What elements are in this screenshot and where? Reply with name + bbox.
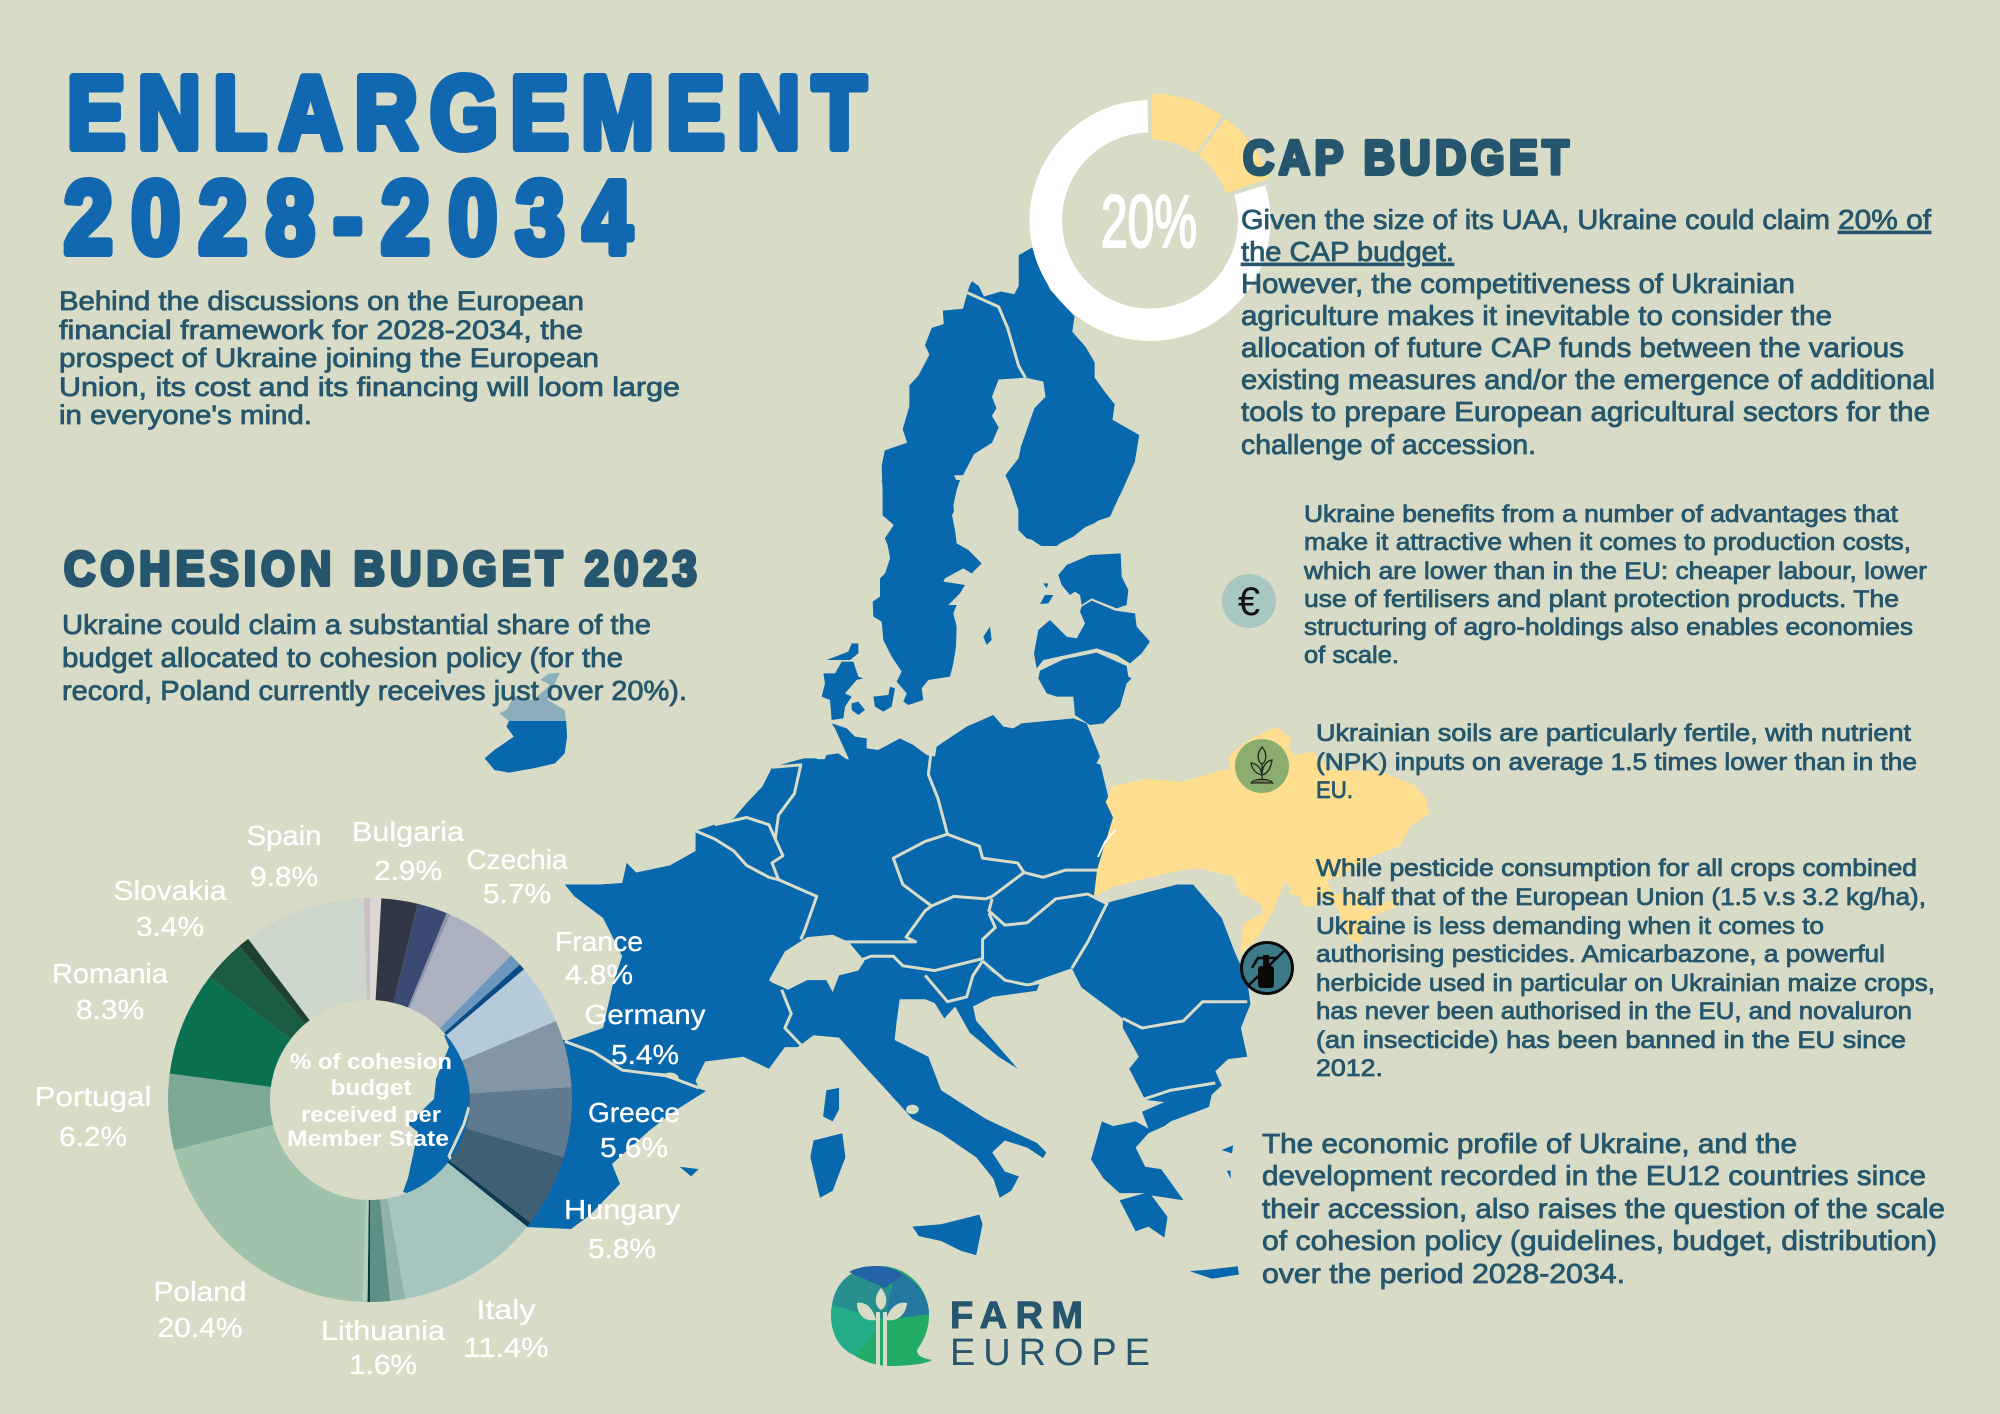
donut country labels: 5.7%	[483, 878, 551, 909]
text: fertile soils: (NPK) inputs on average 1.5 times lower than in the	[1316, 749, 1917, 776]
Iberian peninsula	[403, 1035, 706, 1229]
text: pesticides: has never been authorised in the EU, and novaluron	[1316, 998, 1912, 1025]
donut country labels: Slovakia	[114, 875, 227, 906]
logo mark	[831, 1266, 932, 1366]
text: economic profile	[1262, 1128, 1945, 1289]
text: production costs: structuring of agro-holdings also enables economies	[1304, 614, 1913, 641]
Ireland	[485, 673, 567, 773]
text: economic profile: development recorded in the EU12 countries since	[1262, 1160, 1926, 1191]
text: production costs: Ukraine benefits from a number of advantages that	[1304, 501, 1898, 528]
Crete	[1190, 1266, 1239, 1279]
title: ENLARGEMENT	[67, 55, 866, 171]
donut centre label: received per	[301, 1102, 441, 1127]
donut country labels: Bulgaria	[352, 816, 464, 847]
text: pesticides: (an insecticide) has been banned in the EU since	[1316, 1027, 1906, 1054]
Farm Europe logo	[831, 1266, 1150, 1374]
CAP budget text: agriculture makes it inevitable to consider the	[1241, 300, 1832, 331]
title: 2028-2034	[64, 160, 632, 276]
donut country labels: Romania	[52, 958, 168, 989]
donut country labels: Poland	[154, 1276, 246, 1307]
CAP budget text: tools to prepare European agricultural sectors for the	[1241, 396, 1930, 427]
donut country labels: 2.9%	[374, 855, 442, 886]
icon: euro	[1222, 574, 1276, 628]
Baltic region: Sweden south, Finland south, Baltic states, Denmark, Germany and Poland north	[780, 480, 1150, 880]
donut country labels: France	[555, 926, 643, 957]
icon: plant	[1235, 739, 1289, 793]
donut country labels: 11.4%	[464, 1332, 548, 1363]
text: production costs: use of fertilisers and plant protection products. The	[1304, 586, 1899, 613]
intro text: in everyone's mind.	[59, 400, 312, 430]
text: production costs: which are lower than in the EU: cheaper labour, lower	[1303, 558, 1927, 585]
donut country labels: 5.4%	[611, 1039, 679, 1070]
donut country labels: Lithuania	[321, 1315, 445, 1346]
Switzerland gap	[769, 935, 865, 992]
CAP budget text: challenge of accession.	[1241, 429, 1536, 460]
text: economic profile: of cohesion policy (guidelines, budget, distribution)	[1262, 1225, 1937, 1256]
text: fertile soils	[1316, 720, 1917, 804]
text: production costs	[1303, 501, 1927, 669]
cohesion donut chart	[219, 949, 521, 1251]
20% label: 20%	[1101, 180, 1197, 263]
intro text: financial framework for 2028-2034, the	[59, 315, 583, 345]
donut country labels: 5.8%	[588, 1233, 656, 1264]
text: production costs: make it attractive when it comes to production costs,	[1304, 529, 1911, 556]
donut country labels: Hungary	[564, 1194, 680, 1225]
text: economic profile: their accession, also raises the question of the scale	[1262, 1193, 1945, 1224]
Ukraine	[1094, 727, 1429, 955]
icon: euro: €	[1238, 580, 1260, 624]
logo wordmark: FARM	[950, 1295, 1083, 1337]
intro text	[59, 286, 680, 430]
CAP budget heading: CAP BUDGET	[1243, 131, 1569, 185]
donut country labels: 9.8%	[250, 861, 318, 892]
text: pesticides: is half that of the European Union (1.5 v.s 3.2 kg/ha),	[1316, 884, 1926, 911]
donut country labels	[34, 816, 706, 1380]
CAP 20% ring chart	[1046, 116, 1254, 325]
CAP budget text: the CAP budget.	[1241, 236, 1454, 267]
text: pesticides: 2012.	[1316, 1055, 1383, 1082]
donut centre label: Member State	[287, 1126, 449, 1151]
donut country labels: Spain	[246, 820, 322, 851]
donut centre label: % of cohesion	[290, 1049, 452, 1074]
title	[64, 55, 866, 276]
donut country labels: Portugal	[34, 1081, 152, 1112]
donut centre label: budget	[330, 1075, 412, 1100]
Greece	[1091, 1093, 1212, 1238]
text: pesticides: While pesticide consumption for all crops combined	[1316, 855, 1917, 882]
Corsica	[823, 1088, 839, 1121]
donut country labels: 1.6%	[349, 1349, 417, 1380]
text: pesticides: authorising pesticides. Amicarbazone, a powerful	[1316, 941, 1885, 968]
cohesion budget text: budget allocated to cohesion policy (for the	[62, 642, 623, 673]
CAP budget text	[1241, 204, 1935, 460]
text: production costs: of scale.	[1304, 642, 1399, 669]
cohesion budget heading: COHESION BUDGET 2023	[64, 542, 697, 596]
Sweden and Finland north	[880, 248, 1139, 596]
donut country labels: 20.4%	[158, 1312, 242, 1343]
Sardinia	[810, 1133, 845, 1198]
donut country labels: 4.8%	[565, 959, 633, 990]
donut centre label	[287, 1049, 452, 1151]
intro text: prospect of Ukraine joining the European	[59, 343, 599, 373]
intro text: Behind the discussions on the European	[59, 286, 584, 316]
CAP budget text: 20% of	[1838, 204, 1931, 235]
donut country labels: 6.2%	[59, 1121, 127, 1152]
icon: banned sprayer	[1242, 942, 1292, 994]
donut country labels: Italy	[476, 1294, 536, 1325]
donut country labels: Germany	[584, 999, 706, 1030]
text: economic profile: over the period 2028-2034.	[1262, 1258, 1625, 1289]
donut country labels: 3.4%	[136, 911, 204, 942]
CAP budget text: existing measures and/or the emergence of additional	[1241, 364, 1935, 395]
intro text: Union, its cost and its financing will loom large	[59, 372, 680, 402]
text: economic profile: The economic profile of Ukraine, and the	[1262, 1128, 1797, 1159]
text: pesticides: herbicide used in particular on Ukrainian maize crops,	[1316, 970, 1935, 997]
donut country labels: Czechia	[466, 844, 568, 875]
CAP budget text: However, the competitiveness of Ukrainian	[1241, 268, 1795, 299]
donut country labels: 8.3%	[76, 994, 144, 1025]
donut country labels: Greece	[588, 1097, 680, 1128]
text: pesticides: Ukraine is less demanding when it comes to	[1316, 913, 1824, 940]
cohesion budget text: record, Poland currently receives just over 20%).	[62, 675, 687, 706]
cohesion budget text	[62, 609, 687, 706]
cohesion budget text: Ukraine could claim a substantial share of the	[62, 609, 651, 640]
text: fertile soils: EU.	[1316, 777, 1353, 804]
text: pesticides	[1316, 855, 1935, 1082]
donut country labels: 5.6%	[600, 1132, 668, 1163]
CAP budget text: Given the size of its UAA, Ukraine could claim	[1241, 204, 1830, 235]
CAP budget text: allocation of future CAP funds between the various	[1241, 332, 1904, 363]
mainland Europe	[565, 748, 1250, 1279]
Sicily	[912, 1215, 983, 1255]
map of the European Union and Ukraine	[403, 248, 1429, 1279]
text: fertile soils: Ukrainian soils are particularly fertile, with nutrient	[1316, 720, 1911, 747]
Farm Europe logo: EUROPE	[950, 1332, 1150, 1374]
